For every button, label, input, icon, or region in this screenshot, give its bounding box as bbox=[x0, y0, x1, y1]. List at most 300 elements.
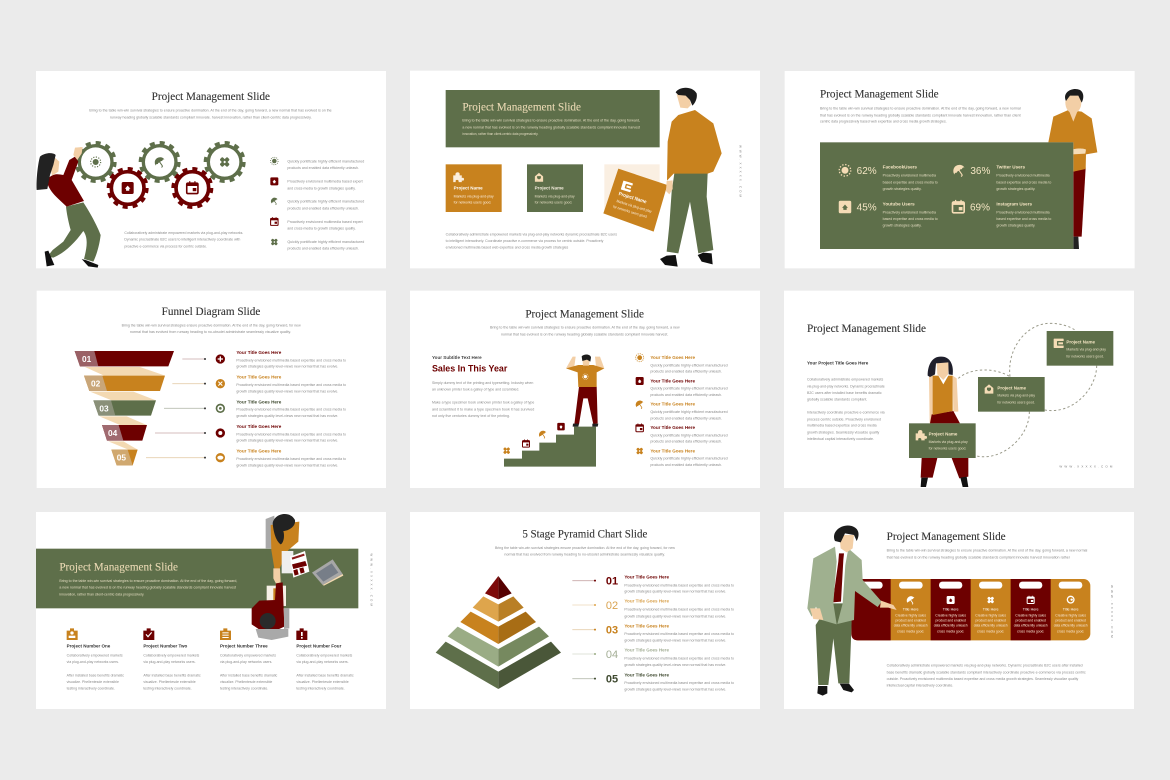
description 3 bbox=[236, 399, 346, 418]
card: rotated orange over cream: Project Name bbox=[618, 191, 647, 205]
left paragraph: intellectual capital interactively coordinate. bbox=[807, 437, 874, 441]
stat: instagram: 69% bbox=[970, 203, 990, 214]
intro text bbox=[820, 107, 1021, 124]
stat: facebook: Proactively envisioned multimedia bbox=[883, 174, 937, 178]
band column 5: data efficiently unleash bbox=[1054, 624, 1088, 628]
list item 3 bbox=[269, 196, 364, 210]
gear: sun bbox=[77, 143, 115, 181]
subtitle: Your Subtitle Text Here bbox=[432, 355, 482, 361]
column: project four: visualize. Phellentesde extensible bbox=[296, 680, 349, 684]
funnel connectors bbox=[85, 367, 165, 450]
description 1 bbox=[236, 350, 346, 369]
card: olive: Markets via plug-and-play bbox=[535, 194, 575, 198]
funnel descriptions bbox=[236, 350, 346, 467]
stat: youtube: Proactively envisioned multimedia bbox=[883, 210, 937, 214]
pyramid stage 02 bbox=[606, 599, 734, 618]
pyramid stage 01: 01 bbox=[606, 576, 618, 588]
column: project one: via plug-and-play networks users. bbox=[67, 660, 119, 664]
bottom paragraph: Collaboratively administrate empowered markets via plug-and-play networks. Dynamic procrastinate B2C users after installed bbox=[887, 664, 1083, 668]
column: project two: After installed base benefits dramatic bbox=[143, 673, 201, 677]
pyramid stage 03: Your Title Goes Here bbox=[624, 623, 669, 629]
list item 1: Quickly pontificate highly efficient manufactured bbox=[287, 159, 364, 163]
item 1 bbox=[636, 354, 728, 374]
banner text: Bring to the table win-win survival strategies to ensure proactive domination. At the end of the day, going forward, bbox=[59, 579, 237, 583]
column: project four: Project Number Four bbox=[296, 644, 341, 650]
intro text bbox=[89, 108, 332, 120]
pyramid stage 03: growth strategies quality level-views new normal that has evolve. bbox=[624, 639, 726, 643]
band column 4: cross media good. bbox=[1017, 629, 1044, 633]
column: project two bbox=[143, 628, 201, 691]
description 5 bbox=[236, 449, 346, 467]
stat: youtube: growth strategies quality. bbox=[883, 224, 922, 228]
banner bbox=[36, 549, 358, 608]
item 2 bbox=[636, 377, 728, 397]
pyramid stage 01: Proactively envisioned multimedia based expertise and cross media to bbox=[624, 583, 734, 587]
list item 1: products and enabled data efficiently unleash. bbox=[287, 166, 359, 170]
item 2: Quickly pontificate highly efficient manufactured bbox=[650, 387, 728, 391]
pyramid layer 4 bbox=[448, 627, 549, 667]
description 2: Proactively envisioned multimedia based expertise and cross media to bbox=[236, 383, 346, 387]
band column 2: cross media good. bbox=[937, 629, 964, 633]
card: olive: Project Name bbox=[535, 186, 564, 192]
description 5: Your Title Goes Here bbox=[236, 449, 282, 455]
left paragraph: an unknown printer took a galley of type and scrambled. bbox=[432, 388, 519, 392]
stairs bbox=[504, 427, 596, 467]
left paragraph bbox=[807, 378, 886, 441]
intro text: normal that has evolved from runway heading to no-ubsolet administrate seamlessly visualize quality. bbox=[504, 553, 665, 557]
gear: box bbox=[109, 169, 147, 207]
pyramid stage 03: 03 bbox=[606, 625, 618, 637]
bottom paragraph: outside. Proactively envisioned multimedia based expertise and cross media growth strategies. Seamlessly visualize quality bbox=[887, 677, 1078, 681]
item 3: Your Title Goes Here bbox=[650, 402, 695, 408]
list item 1 bbox=[271, 157, 364, 170]
pyramid stage 02: Proactively envisioned multimedia based expertise and cross media to bbox=[624, 608, 734, 612]
funnel stage 02: 02 bbox=[91, 379, 101, 389]
band column 3: data efficiently unleash bbox=[974, 624, 1008, 628]
pyramid layer 3 bbox=[460, 612, 536, 644]
description 4: Your Title Goes Here bbox=[236, 424, 282, 430]
bottom paragraph: base benefits dramatic globally scalable standards compliant interactively coordinate proactive e-commerce via process centric bbox=[887, 670, 1086, 674]
column: project two: visualize. Phellentesde extensible bbox=[143, 680, 196, 684]
left paragraph: Interactively coordinate proactive e-commerce via bbox=[807, 411, 886, 415]
description 3: growth strategies quality level-views new normal that has evolve. bbox=[236, 414, 338, 418]
description 3: Proactively envisioned multimedia based expertise and cross media to bbox=[236, 408, 346, 412]
band column 3 bbox=[974, 596, 1008, 633]
pyramid stage 05: 05 bbox=[606, 674, 618, 686]
list item 2: and cross-media to growth strategies quality. bbox=[287, 186, 356, 190]
stats panel bbox=[820, 142, 1073, 249]
pyramid stage 02: Your Title Goes Here bbox=[624, 599, 669, 605]
column: project one: Collaboratively empowered markets bbox=[67, 654, 123, 658]
bottom paragraph bbox=[887, 664, 1086, 687]
stat: youtube: Youtube Users bbox=[883, 201, 915, 207]
intro text: Bring the table win-win survival strategies ensure proactive domination. At the end of the day, going forward, for new bbox=[495, 546, 675, 550]
pyramid stage 04: 04 bbox=[606, 649, 618, 661]
item 3: Quickly pontificate highly efficient manufactured bbox=[650, 410, 728, 414]
description 1: growth strategies quality level-views new normal that has evolve. bbox=[236, 365, 338, 369]
description 4: growth strategies quality level-views new normal that has evolve. bbox=[236, 439, 338, 443]
band: maroon segments bbox=[851, 579, 1051, 640]
title: Funnel Diagram Slide bbox=[162, 304, 260, 318]
stat: instagram: Proactively envisioned multimedia bbox=[996, 210, 1051, 214]
band column 1 bbox=[894, 594, 928, 633]
column: project three: Project Number Three bbox=[220, 644, 268, 650]
gear: umbrella bbox=[141, 143, 179, 181]
band column 4: data efficiently unleash bbox=[1014, 624, 1048, 628]
stat: facebook: based expertise and cross media to bbox=[883, 180, 938, 184]
card: top right bbox=[1047, 331, 1113, 366]
band column 4: product and enabled bbox=[1015, 619, 1046, 623]
card: bottom: for networks users good. bbox=[929, 447, 966, 451]
stat: instagram: Instagram Users bbox=[996, 201, 1032, 207]
card: orange: Project Name bbox=[454, 186, 483, 192]
intro text: runway heading globally scalable standards compliant innovate. harvest innovation, rather than client-centric data progressively. bbox=[110, 116, 312, 120]
figure: flexing man bbox=[566, 354, 604, 427]
title: Project Management Slide bbox=[807, 321, 926, 335]
band column 5: product and enabled bbox=[1055, 619, 1086, 623]
card: olive bbox=[527, 164, 583, 212]
website label: WWW.XXXXX.COM bbox=[1059, 465, 1113, 469]
banner text bbox=[462, 119, 640, 136]
column: project two: Collaboratively empowered markets bbox=[143, 654, 199, 658]
pyramid stage 01 bbox=[606, 574, 734, 594]
card: rotated orange over cream: for networks users good. bbox=[612, 205, 648, 219]
intro text: centric data progressively based web expertise and cross media growth strategies. bbox=[820, 120, 947, 124]
card: rotated orange over cream bbox=[603, 164, 667, 232]
dashed connectors bbox=[958, 323, 1097, 457]
title: Project Management Slide bbox=[820, 87, 939, 101]
pyramid stage 01: Your Title Goes Here bbox=[624, 574, 669, 580]
column: project one bbox=[67, 628, 124, 691]
item 2: products and enabled data efficiently unleash. bbox=[650, 393, 722, 397]
column: project four: via plug-and-play networks users. bbox=[296, 660, 349, 664]
list item 5: products and enabled data efficiently unleash. bbox=[287, 247, 359, 251]
stat: twitter bbox=[951, 162, 1051, 191]
item 1: products and enabled data efficiently unleash. bbox=[650, 370, 722, 374]
item 4: Quickly pontificate highly efficient manufactured bbox=[650, 433, 728, 437]
pyramid stage 02: 02 bbox=[606, 600, 618, 612]
left paragraph: Simply dummy text of the printing and typesetting. Industry when bbox=[432, 381, 533, 385]
stat: twitter: Twitter Users bbox=[996, 165, 1025, 171]
title: Project Management Slide bbox=[525, 306, 644, 320]
list item 4 bbox=[271, 217, 363, 231]
band: pills bbox=[859, 582, 1082, 589]
intro text bbox=[490, 326, 680, 336]
intro text: that has evolved is on the runway heading globally scalable standards compliant innovate harvest innovation, rather than client bbox=[820, 113, 1021, 117]
intro text: Bring to the table win-win survival strategies to ensure proactive domination. At the end of the day, going forward, a new normal that has evolved is on the bbox=[89, 108, 332, 112]
card: middle: Markets via plug-and-play bbox=[997, 394, 1035, 398]
band column 2: product and enabled bbox=[935, 619, 966, 623]
description 4: Proactively envisioned multimedia based expertise and cross media to bbox=[236, 432, 346, 436]
stat: facebook: growth strategies quality. bbox=[883, 187, 922, 191]
band column 1: cross media good. bbox=[897, 629, 924, 633]
band column 5: Creative highly sales bbox=[1055, 613, 1086, 617]
band column 5: Title Here bbox=[1063, 607, 1079, 611]
stat: instagram: growth strategies quality. bbox=[996, 224, 1035, 228]
card: rotated orange over cream: Markets via plug-and-play bbox=[616, 199, 652, 214]
list item 3: products and enabled data efficiently unleash. bbox=[287, 206, 359, 210]
left paragraph: and scrambled it to make a type specimen book it has survived bbox=[432, 407, 534, 411]
item 3: products and enabled data efficiently unleash. bbox=[650, 416, 722, 420]
stat: youtube: 45% bbox=[857, 203, 877, 214]
description 3: Your Title Goes Here bbox=[236, 399, 282, 405]
stat: youtube bbox=[839, 201, 938, 228]
arrows bbox=[146, 358, 206, 459]
column: project two: Project Number Two bbox=[143, 644, 187, 650]
banner title: Project Management Slide bbox=[59, 559, 178, 573]
panel: project management gears bbox=[36, 71, 386, 268]
stair icons bbox=[503, 423, 565, 454]
title: 5 Stage Pyramid Chart Slide bbox=[522, 527, 647, 541]
band column 1: data efficiently unleash bbox=[894, 624, 928, 628]
panel: standing man with project cards bbox=[410, 71, 760, 268]
figure: woman holding card bbox=[921, 357, 968, 487]
left paragraph: process centric outside. Proactively envisioned bbox=[807, 417, 881, 421]
banner text: innovation, rather than client-centric data progressively. bbox=[59, 592, 144, 596]
pyramid layer 2 bbox=[473, 596, 524, 622]
gears chain bbox=[77, 143, 244, 207]
list item 3: Quickly pontificate highly efficient manufactured bbox=[287, 200, 364, 204]
left paragraph: multimedia based expertise and cross media bbox=[807, 424, 878, 428]
left paragraph: not only five centuries dummy text of the printing. bbox=[432, 414, 510, 418]
description 1: Your Title Goes Here bbox=[236, 350, 282, 356]
stat: twitter: Proactively envisioned multimedia bbox=[996, 174, 1051, 178]
vertical website label: WWW.XXXXX.COM bbox=[370, 553, 374, 606]
description 5: Proactively envisioned multimedia based expertise and cross media to bbox=[236, 457, 346, 461]
description 2 bbox=[236, 375, 346, 393]
card: bottom: Project Name bbox=[929, 432, 958, 438]
item 1: Your Title Goes Here bbox=[650, 355, 695, 361]
figure: standing man bbox=[660, 88, 722, 267]
column: project one: After installed base benefits dramatic bbox=[67, 673, 124, 677]
column: project two: testing interactively coordinate. bbox=[143, 687, 192, 691]
title: Project Management Slide bbox=[152, 89, 270, 103]
description 2: Your Title Goes Here bbox=[236, 375, 282, 381]
pyramid stage 03 bbox=[606, 623, 734, 643]
band column 2: Creative highly sales bbox=[935, 613, 966, 617]
list item 5 bbox=[271, 238, 364, 251]
band column 4 bbox=[1014, 596, 1048, 633]
intro text: Bring to the table win-win survival strategies to ensure proactive domination. At the end of the day, going forward, a new normal bbox=[887, 548, 1088, 552]
item 3 bbox=[634, 399, 728, 420]
item 5 bbox=[636, 447, 728, 467]
funnel chart bbox=[75, 351, 174, 465]
card: orange bbox=[446, 164, 502, 212]
item 1: Quickly pontificate highly efficient manufactured bbox=[650, 363, 728, 367]
list item 5: Quickly pontificate highly efficient manufactured bbox=[287, 240, 364, 244]
left paragraph: globally scalable standards compliant. bbox=[807, 398, 867, 402]
panel: funnel diagram bbox=[37, 291, 386, 488]
panel: pyramid chart bbox=[410, 512, 760, 709]
card: olive: for networks users good. bbox=[535, 201, 572, 205]
stat: youtube: based expertise and cross media to bbox=[883, 217, 938, 221]
band column 3: product and enabled bbox=[975, 619, 1006, 623]
band background bbox=[851, 579, 1090, 640]
banner bbox=[446, 90, 660, 147]
funnel stage 05: 05 bbox=[117, 453, 126, 463]
band column 2: Title Here bbox=[943, 607, 959, 611]
gear: calendar bbox=[173, 169, 211, 207]
band column 5: cross media good. bbox=[1057, 629, 1084, 633]
panel: user statistics bbox=[785, 71, 1135, 268]
card: middle bbox=[978, 377, 1045, 412]
stat: instagram: based expertise and cross media to bbox=[996, 217, 1051, 221]
card: middle: Project Name bbox=[997, 385, 1026, 391]
column: project four bbox=[296, 628, 354, 691]
funnel stage 04: 04 bbox=[108, 428, 118, 438]
description 1: Proactively envisioned multimedia based expertise and cross media to bbox=[236, 358, 346, 362]
stat: instagram bbox=[952, 200, 1051, 228]
item 4 bbox=[636, 423, 728, 444]
item 5: products and enabled data efficiently unleash. bbox=[650, 463, 722, 467]
pyramid stage 03: Proactively envisioned multimedia based expertise and cross media to bbox=[624, 632, 734, 636]
intro text bbox=[122, 323, 301, 334]
banner title: Project Management Slide bbox=[462, 99, 581, 113]
pyramid layer 1 bbox=[485, 576, 512, 599]
intro text: Bring the table win-win survival strategies ensure proactive domination. At the end of the day, going forward, for new bbox=[122, 323, 301, 327]
intro text: that has evolved is on the runway heading globally scalable standards compliant innovate harvest innovation rather bbox=[887, 555, 1071, 559]
pyramid stage 04: growth strategies quality level-views new normal that has evolve. bbox=[624, 663, 726, 667]
list item 4: Proactively envisioned multimedia based expert bbox=[287, 220, 363, 224]
pyramid stage 05: Proactively envisioned multimedia based expertise and cross media to bbox=[624, 681, 734, 685]
intro text: normal that has evolved from runway heading to no-ubsolet administrate seamlessly visualize quality. bbox=[130, 330, 291, 334]
band column 3: cross media good. bbox=[977, 629, 1004, 633]
figure: woman pushing gears bbox=[37, 147, 101, 268]
card: orange: Markets via plug-and-play bbox=[454, 194, 494, 198]
band column 3: Title Here bbox=[983, 607, 999, 611]
title: Project Management Slide bbox=[887, 529, 1006, 543]
bottom paragraph bbox=[446, 232, 617, 250]
column: project three: via plug-and-play networks users. bbox=[220, 660, 272, 664]
card: orange: for networks users good. bbox=[454, 201, 491, 205]
band column 1: Creative highly sales bbox=[895, 613, 926, 617]
intro text bbox=[495, 546, 675, 557]
band column 4: Creative highly sales bbox=[1015, 613, 1046, 617]
bottom paragraph: envisioned multimedia based web expertise and cross media growth strategies bbox=[446, 246, 568, 250]
pyramid stage 05: Your Title Goes Here bbox=[624, 672, 669, 678]
bottom paragraph: Collaboratively administrate empowered markets via plug-and-play networks dynamic procrastinate B2C users bbox=[446, 232, 617, 236]
stat: facebook bbox=[839, 165, 938, 191]
stat: twitter: 36% bbox=[970, 166, 990, 177]
band column 2 bbox=[934, 596, 968, 633]
stat: facebook: 62% bbox=[857, 166, 877, 177]
pointer lines bbox=[572, 580, 596, 680]
left paragraph: via plug-and-play networks. Dynamic procrastinate bbox=[807, 384, 885, 388]
item 2: Your Title Goes Here bbox=[650, 378, 695, 384]
item 5: Your Title Goes Here bbox=[650, 448, 695, 454]
column: project four: testing interactively coordinate. bbox=[296, 687, 345, 691]
list item 2 bbox=[270, 177, 363, 190]
card: bottom bbox=[909, 423, 976, 458]
card: top right: for networks users good. bbox=[1066, 354, 1104, 358]
bottom paragraph bbox=[124, 231, 243, 248]
pyramid stage 05 bbox=[606, 672, 734, 692]
subtitle: Your Project Title Goes Here bbox=[807, 360, 869, 366]
intro text: normal that has evolved is on the runway heading globally scalable standards compliant innovate harvest. bbox=[501, 332, 668, 336]
bottom paragraph: Dynamic procrastinate B2C users to intelligent interactively coordinate with bbox=[124, 238, 240, 242]
item 4: Your Title Goes Here bbox=[650, 425, 695, 431]
column: project three: Collaboratively empowered markets bbox=[220, 654, 276, 658]
left paragraph: Collaboratively administrate empowered markets bbox=[807, 378, 883, 382]
column: project four: Collaboratively empowered markets bbox=[296, 654, 352, 658]
list item 2: Proactively envisioned multimedia based expert bbox=[287, 180, 363, 184]
banner text: innovation, rather than client-centric data progressively. bbox=[462, 132, 538, 136]
pyramid stage 04: Your Title Goes Here bbox=[624, 648, 669, 654]
gear: bandage bbox=[206, 143, 244, 181]
column: project three: testing interactively coordinate. bbox=[220, 687, 268, 691]
bottom paragraph: intellectual capital interactively coordinate. bbox=[887, 683, 953, 687]
funnel stage 01: 01 bbox=[82, 354, 92, 364]
description 4 bbox=[236, 424, 346, 443]
band column 5 bbox=[1054, 596, 1088, 633]
pyramid stage 01: growth strategies quality level-views new normal that has evolve. bbox=[624, 590, 726, 594]
card: top right: Project Name bbox=[1066, 339, 1095, 345]
figure: pointing presenter bbox=[807, 525, 897, 696]
panel: handshake banner bbox=[36, 512, 386, 709]
band column 4: Title Here bbox=[1023, 607, 1039, 611]
intro text: Bring to the table win-win survival strategies to ensure proactive domination. At the end of the day, going forward, a new normal bbox=[820, 107, 1021, 111]
column: project one: Project Number One bbox=[67, 644, 111, 650]
right list bbox=[634, 354, 728, 467]
vertical website label: WWW.XXXXX.COM bbox=[1110, 585, 1114, 638]
heading: Sales In This Year bbox=[432, 363, 508, 373]
intro text bbox=[887, 548, 1088, 559]
pyramid stage 04 bbox=[606, 648, 734, 667]
intro text: Bring to the table win-win survival strategies to ensure proactive domination. At the end of the day, going forward, a new bbox=[490, 326, 680, 330]
vertical website label: WWW.XXXXX.COM bbox=[739, 145, 743, 197]
column: project four: After installed base benefits dramatic bbox=[296, 673, 354, 677]
stat: twitter: based expertise and cross media to bbox=[996, 180, 1051, 184]
list: icons and descriptions bbox=[269, 157, 364, 251]
illustration: handshake from above bbox=[252, 514, 343, 640]
panel: sales stairs bbox=[410, 291, 760, 488]
description 5: growth strategies quality level-views new normal that has evolve. bbox=[236, 463, 338, 467]
panel: presenter with column band bbox=[784, 512, 1134, 709]
pyramid stage 05: growth strategies quality level-views new normal that has evolve. bbox=[624, 688, 726, 692]
column: project three: After installed base benefits dramatic bbox=[220, 673, 277, 677]
column: project one: visualize. Phellentesde extensible bbox=[67, 680, 119, 684]
stat: facebook: FacebookUsers bbox=[883, 165, 917, 171]
banner text: a new normal that has evolved is on the runway heading globally scalable standards compliant innovate harvest bbox=[59, 586, 236, 590]
banner text: Bring to the table win-win survival strategies to ensure proactive domination. At the end of the day, going forward, bbox=[462, 119, 640, 123]
band column 2: data efficiently unleash bbox=[934, 624, 968, 628]
list item 4: and cross-media to growth strategies quality. bbox=[287, 227, 356, 231]
bottom paragraph: Collaboratively administrate empowered markets via plug-and-play networks. bbox=[124, 231, 243, 235]
left paragraph: growth strategies. Seamlessly visualize quality bbox=[807, 430, 879, 434]
stat: twitter: growth strategies quality. bbox=[996, 187, 1035, 191]
band column 1: Title Here bbox=[903, 607, 919, 611]
card: bottom: Markets via plug-and-play bbox=[929, 440, 968, 444]
description 2: growth strategies quality level-views new normal that has evolve. bbox=[236, 389, 338, 393]
round icons bbox=[216, 354, 225, 462]
left paragraph bbox=[432, 381, 534, 418]
card: top right: Markets via plug-and-play bbox=[1066, 348, 1106, 352]
band column 1: product and enabled bbox=[895, 619, 926, 623]
banner text bbox=[59, 579, 237, 596]
figure: man behind panel bbox=[1048, 89, 1097, 249]
column: project one: testing interactively coordinate. bbox=[67, 687, 115, 691]
item 4: products and enabled data efficiently unleash. bbox=[650, 440, 722, 444]
column: project three bbox=[220, 628, 277, 691]
left paragraph: B2C users after installed base benefits dramatic bbox=[807, 391, 882, 395]
pyramid bbox=[436, 576, 561, 689]
card: middle: for networks users good. bbox=[997, 400, 1035, 404]
column: project three: visualize. Phellentesde extensible bbox=[220, 680, 272, 684]
column: project two: via plug-and-play networks users. bbox=[143, 660, 196, 664]
item 5: Quickly pontificate highly efficient manufactured bbox=[650, 457, 728, 461]
banner text: a new normal that has evolved is on the runway heading globally scalable standards compliant innovate harvest bbox=[462, 125, 640, 129]
funnel stage 03: 03 bbox=[99, 403, 109, 413]
